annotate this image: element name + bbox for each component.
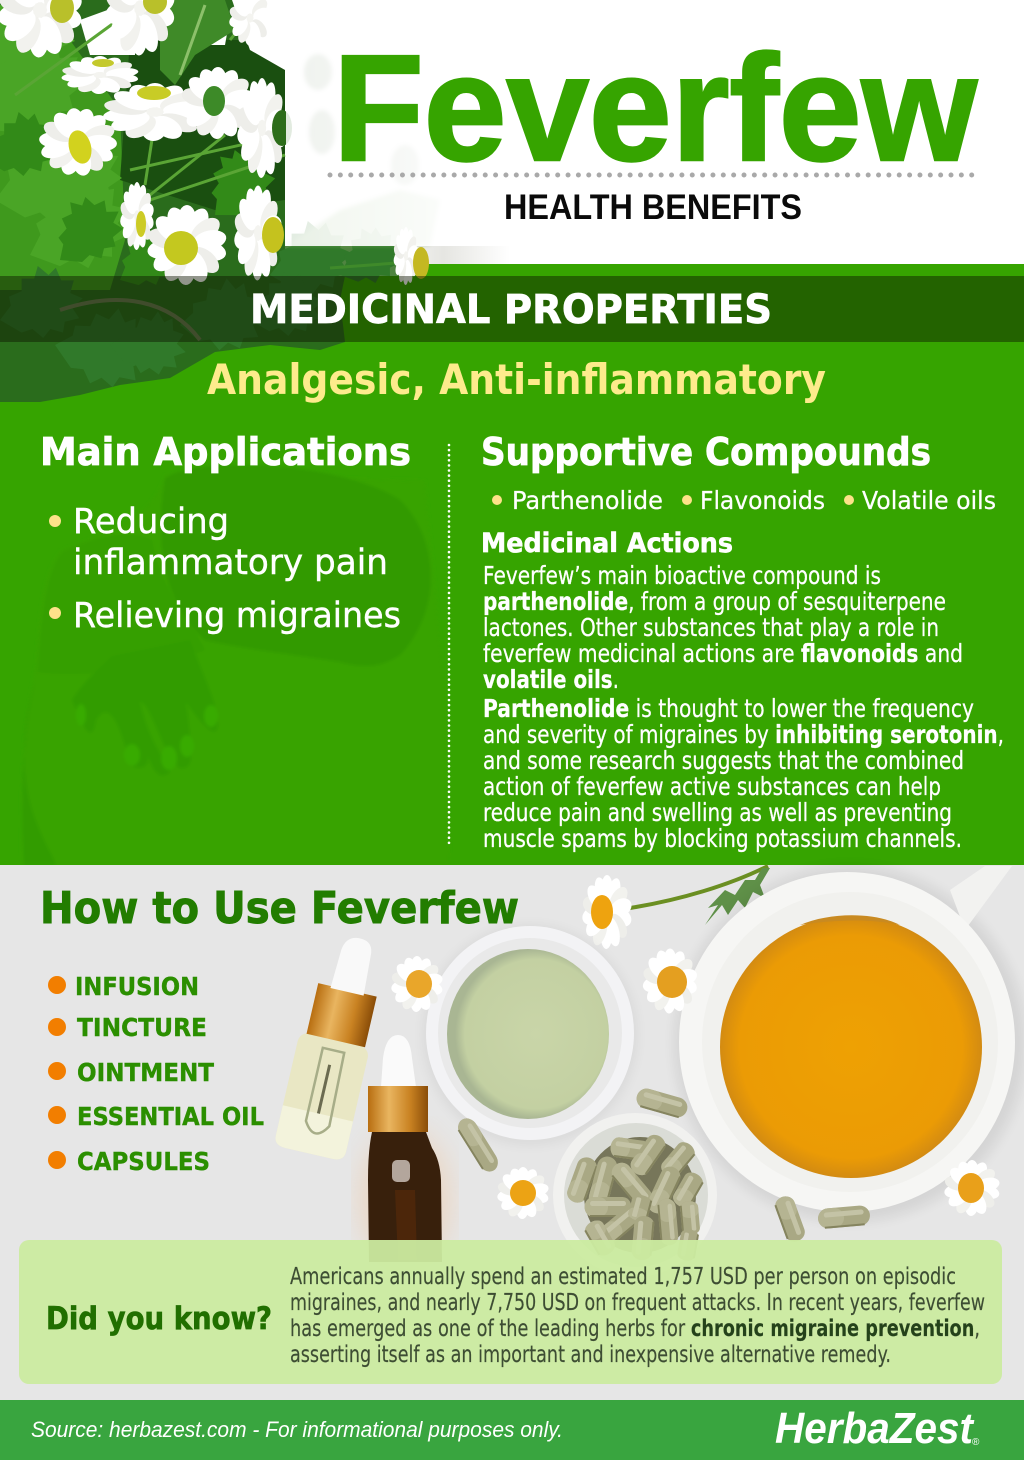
list: forms of use: INFUSION <box>75 972 199 1001</box>
illustration: woman holding her shoulder <box>21 465 450 865</box>
callout: did you know <box>19 1240 1002 1384</box>
list: compounds: Volatile oils <box>862 486 996 515</box>
list: main applications <box>49 502 401 636</box>
text block: medicinal actions: Feverfew’s main bioactive compound is <box>483 561 881 590</box>
subtitle: HEALTH BENEFITS <box>504 188 802 227</box>
panel: how to use <box>0 865 1024 1400</box>
illustration: bowl of capsules <box>553 1113 717 1277</box>
list: compounds: Flavonoids <box>700 486 825 515</box>
list: forms of use: CAPSULES <box>77 1147 210 1176</box>
panel: translucent title backing <box>286 0 510 264</box>
list: forms of use: TINCTURE <box>77 1013 207 1042</box>
callout: did you know: Did you know? <box>46 1301 272 1337</box>
column divider <box>448 445 450 846</box>
properties subheading: Analgesic, Anti-inflammatory <box>207 355 826 404</box>
heading: medicinal actions: Medicinal Actions <box>481 528 733 559</box>
heading: how to use feverfew: How to Use Feverfew <box>40 883 519 934</box>
illustration: clear dropper bottle <box>274 930 393 1161</box>
photo: feverfew flowers and leaves <box>0 0 410 402</box>
logo: HerbaZest: ® <box>972 1437 980 1448</box>
panel: footer <box>0 1400 1024 1460</box>
list: main applications: inflammatory pain <box>73 543 388 583</box>
list: compounds <box>492 486 996 515</box>
heading: supportive compounds: Supportive Compounds <box>481 430 931 474</box>
list: main applications: Reducing <box>73 502 229 542</box>
title: Feverfew <box>333 23 978 192</box>
small daisy overlapping the band <box>393 227 429 285</box>
list: main applications: Relieving migraines <box>73 596 401 636</box>
illustration: tea cup <box>674 866 1024 1222</box>
illustration: amber dropper bottle <box>360 1035 450 1270</box>
heading: main applications: Main Applications <box>40 430 411 474</box>
logo: HerbaZest: HerbaZest <box>775 1404 975 1453</box>
list: forms of use: OINTMENT <box>77 1058 214 1087</box>
text block: medicinal actions <box>483 561 1004 853</box>
illustration: loose capsules <box>454 1086 871 1244</box>
illustration: small daisies <box>390 948 1001 1219</box>
list: compounds: Parthenolide <box>512 486 663 515</box>
illustration: daisy stem <box>581 866 770 949</box>
heading: medicinal properties: MEDICINAL PROPERTIES <box>250 287 772 333</box>
list: forms of use: ESSENTIAL OIL <box>77 1102 264 1131</box>
text block: medicinal actions: volatile oils. <box>483 665 619 694</box>
text block: medicinal actions: parthenolide, from a group of sesquiterpene <box>483 587 946 616</box>
panel: green medicinal properties section <box>0 264 1024 865</box>
heading band <box>0 276 1024 342</box>
source note: Source: herbazest.com - For informational purposes only. <box>31 1417 563 1442</box>
dotted divider <box>330 172 975 178</box>
list: forms of use <box>48 972 264 1176</box>
illustration: bowl of infused oil <box>423 925 637 1145</box>
text block: medicinal actions: feverfew medicinal actions are flavonoids and <box>483 639 963 668</box>
